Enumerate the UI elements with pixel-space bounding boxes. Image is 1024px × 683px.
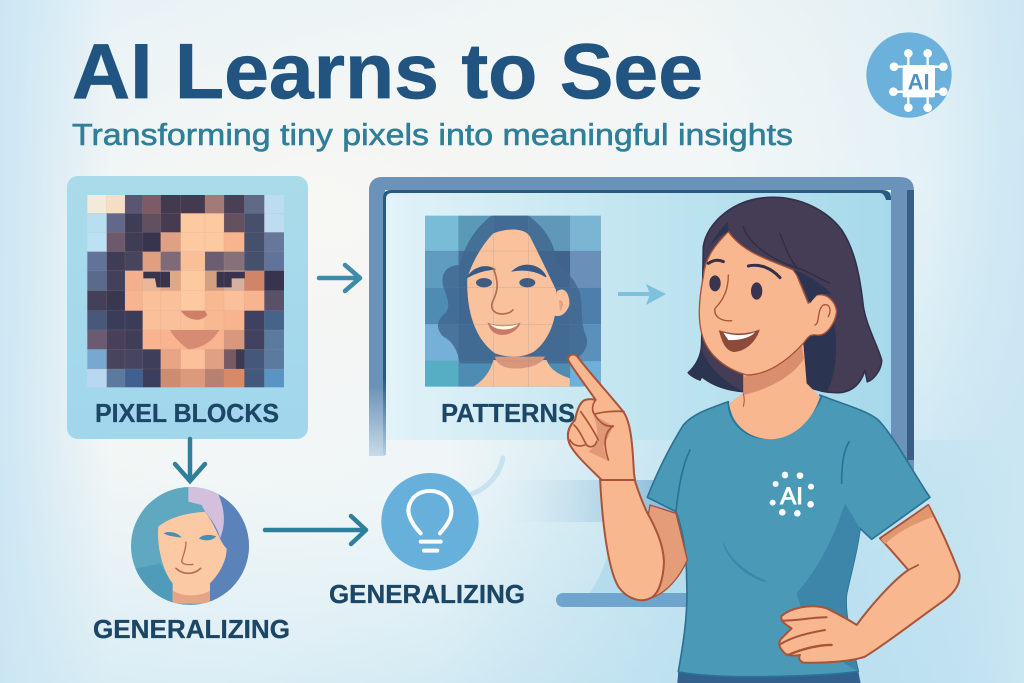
decorative curve to bulb [472, 458, 503, 494]
subtitle: Transforming tiny pixels into meaningful insights [72, 117, 793, 152]
monitor screen [385, 192, 891, 440]
monitor stand neck [500, 480, 700, 522]
pixelated face [87, 195, 284, 387]
under-screen glow [440, 440, 1024, 683]
label: patterns: PATTERNS [441, 398, 575, 428]
shirt logo: AI [780, 483, 803, 510]
monitor frame [369, 177, 914, 470]
monitor [369, 177, 1024, 683]
person [568, 197, 960, 683]
label: generalizing right: GENERALIZING [329, 579, 525, 609]
icon: AI chip badge: AI [908, 69, 930, 94]
shirt logo [770, 472, 814, 517]
title: AI Learns to See [72, 27, 703, 115]
icon: AI chip badge [866, 32, 952, 118]
neck and face [699, 222, 837, 439]
arrow: pixels to patterns [319, 265, 360, 291]
arrow: down to generalizing [175, 439, 205, 481]
hair back [688, 197, 882, 393]
patterned portrait [425, 216, 601, 387]
arrow: faint on screen [618, 284, 666, 305]
arms [600, 468, 960, 663]
icon: generalized face [131, 487, 249, 605]
monitor stand base [556, 593, 696, 607]
label: generalizing left: GENERALIZING [93, 614, 290, 644]
label: pixel blocks: PIXEL BLOCKS [95, 398, 279, 428]
icon: lightbulb [381, 473, 479, 570]
t-shirt [647, 395, 930, 683]
hand: pointing finger [568, 355, 635, 480]
arrow: to lightbulb [265, 516, 366, 544]
panel: pixel blocks [67, 176, 308, 439]
